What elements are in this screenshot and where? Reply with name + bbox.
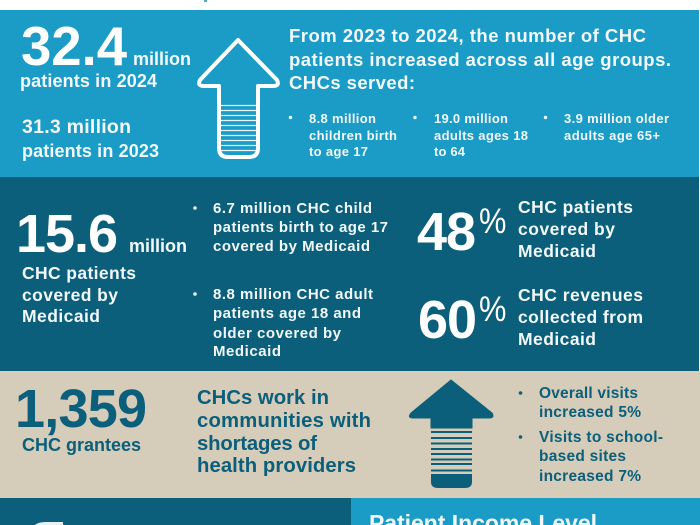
bullet: children: children birth — [309, 128, 397, 143]
bullet: adult patients on Medicaid: older covered by — [213, 325, 342, 342]
stat: 48 percent of patients: Medicaid — [518, 241, 596, 261]
bullet: school-based visits: increased 7% — [539, 468, 641, 485]
text: provider shortages — [197, 387, 371, 477]
bullet: child patients on Medicaid: 6.7 million CHC child — [213, 200, 372, 217]
bullet: older adults — [544, 111, 669, 143]
stat: 31.3 million patients in 2023: 31.3 million — [22, 116, 131, 138]
stat: 48 percent of patients — [417, 197, 633, 262]
bullet: child patients on Medicaid — [193, 200, 388, 255]
bullet: adults: adults ages 18 — [434, 128, 528, 143]
panel: grantees and visits — [0, 371, 700, 498]
bullet: adults: 19.0 million — [434, 111, 508, 126]
bullet: school-based visits: Visits to school- — [539, 429, 663, 446]
stat: 15.6 million covered by Medicaid: covered by — [22, 285, 118, 305]
stat: 1,359 CHC grantees: CHC grantees — [22, 435, 141, 455]
heading: patient increase — [289, 25, 671, 93]
stat: 32.4 million patients in 2024 — [20, 16, 191, 91]
stat: 31.3 million patients in 2023: patients in 2023 — [22, 141, 159, 161]
stat: 15.6 million covered by Medicaid: million — [129, 236, 187, 256]
text: provider shortages: CHCs work in — [197, 387, 329, 409]
stat: 15.6 million covered by Medicaid: 15.6 — [16, 204, 118, 264]
bullet: adults — [413, 111, 528, 159]
bullet: school-based visits — [519, 429, 663, 485]
panel: Medicaid coverage — [0, 177, 699, 371]
bullet: adult patients on Medicaid: Medicaid — [213, 343, 281, 360]
bullet: adults: to 64 — [434, 144, 466, 159]
stat: 32.4 million patients in 2024: 32.4 — [21, 16, 128, 77]
stat: 31.3 million patients in 2023 — [22, 116, 159, 161]
stat: 60 percent of revenues: % — [479, 289, 506, 328]
stat: 48 percent of patients: % — [479, 201, 506, 240]
text: provider shortages: communities with — [197, 410, 371, 432]
text: provider shortages: shortages of — [197, 433, 317, 455]
bullet: overall visits: increased 5% — [539, 404, 641, 421]
icon: partial white shape — [35, 522, 63, 525]
text: provider shortages: health providers — [197, 455, 356, 477]
stat: 60 percent of revenues: 60 — [418, 290, 477, 350]
stat: 48 percent of patients: 48 — [417, 202, 476, 262]
stat: 15.6 million covered by Medicaid: Medicaid — [22, 306, 100, 326]
bullet: children — [289, 111, 397, 159]
bullet: overall visits — [519, 385, 641, 421]
bullet: adult patients on Medicaid: 8.8 million CHC adult — [213, 286, 373, 303]
stat: 32.4 million patients in 2024: million — [133, 49, 191, 69]
stat: 60 percent of revenues: collected from — [518, 307, 643, 327]
heading: patient increase: patients increased across all age groups. — [289, 49, 671, 70]
heading: patient increase: CHCs served: — [289, 72, 415, 93]
bullet: older adults: 3.9 million older — [564, 111, 669, 126]
panel: lower left — [0, 498, 351, 525]
panel: total patients — [0, 10, 699, 177]
bullet: adult patients on Medicaid: patients age 18 and — [213, 305, 361, 322]
stat: 32.4 million patients in 2024: patients in 2024 — [20, 71, 157, 91]
stat: 1,359 CHC grantees: 1,359 — [15, 379, 147, 439]
bullet: adult patients on Medicaid — [193, 286, 373, 360]
bullet: older adults: adults age 65+ — [564, 128, 660, 143]
icon: outlined up arrow — [199, 40, 278, 157]
stat: 60 percent of revenues: Medicaid — [518, 329, 596, 349]
bullet: overall visits: Overall visits — [539, 385, 638, 402]
bullet: child patients on Medicaid: patients birth to age 17 — [213, 219, 388, 236]
stat: 60 percent of revenues: CHC revenues — [518, 285, 643, 305]
panel: patient income level — [351, 498, 700, 525]
stat: 15.6 million covered by Medicaid — [16, 204, 187, 326]
stat: 48 percent of patients: covered by — [518, 219, 615, 239]
stat: 15.6 million covered by Medicaid: CHC patients — [22, 263, 136, 283]
heading: patient increase: From 2023 to 2024, the number of CHC — [289, 25, 646, 46]
bullet: school-based visits: based sites — [539, 448, 626, 465]
title remnant — [204, 0, 207, 2]
stat: 48 percent of patients: CHC patients — [518, 197, 633, 217]
icon: solid up arrow — [409, 380, 493, 488]
bullet: child patients on Medicaid: covered by Medicaid — [213, 238, 370, 255]
bullet: children: to age 17 — [309, 144, 368, 159]
stat: 60 percent of revenues — [418, 285, 643, 350]
bullet: children: 8.8 million — [309, 111, 376, 126]
